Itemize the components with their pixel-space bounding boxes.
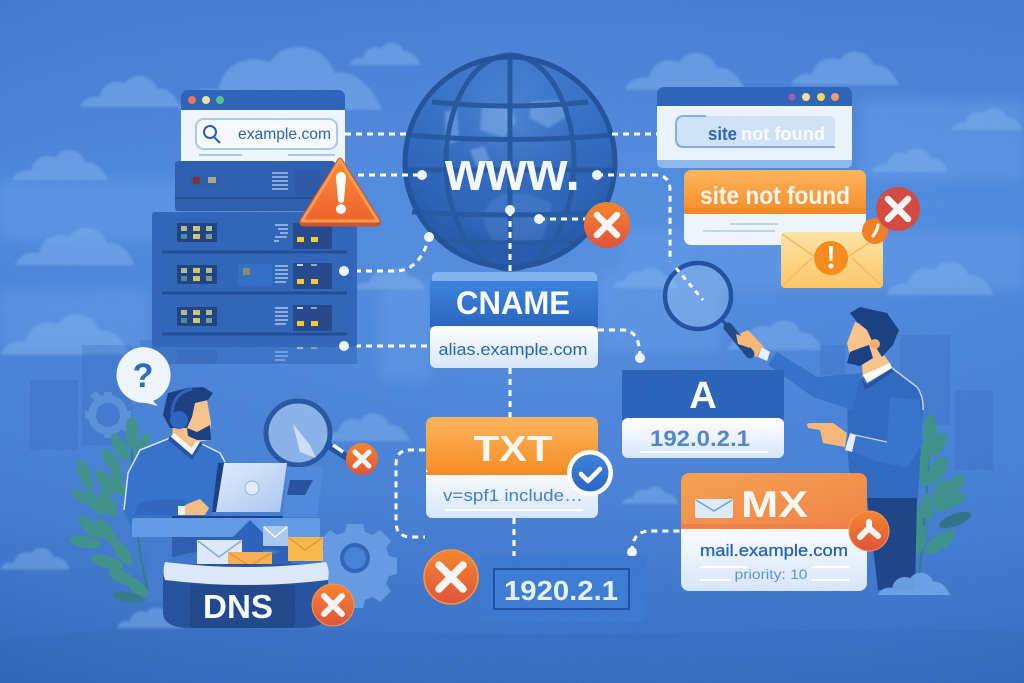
TXT card: TXT (474, 428, 553, 469)
error card: site not found (684, 170, 866, 245)
MX card: priority: 10 (734, 567, 808, 582)
warning triangle (302, 160, 378, 224)
desk (132, 518, 320, 537)
speech bubble: ? (133, 357, 153, 395)
address bar: site (708, 124, 737, 144)
sweater (123, 438, 225, 525)
background gear (85, 391, 132, 438)
person: analyst pointing (733, 307, 923, 590)
error badge: globe (584, 202, 630, 248)
dashed connector lines (344, 134, 681, 556)
rack unit 2 (162, 257, 347, 293)
head (163, 387, 213, 443)
IP error box: 1920.2.1 (504, 575, 618, 606)
top server (175, 161, 335, 211)
globe label www: www. (444, 140, 580, 202)
rack frame (152, 212, 357, 347)
CNAME card: alias.example.com (438, 340, 588, 359)
raised arm (768, 352, 862, 410)
hands (807, 423, 847, 447)
address bar (676, 116, 835, 147)
error badge: MX (849, 511, 889, 551)
head (847, 307, 899, 390)
DNS tub with envelopes: DNS (203, 588, 273, 625)
TXT card (426, 417, 598, 518)
globe landmasses (445, 100, 568, 244)
pointing arm (850, 397, 923, 468)
rack unit 4 faded (152, 338, 357, 364)
error badge: DNS (312, 584, 354, 626)
hand and laptop (185, 499, 209, 515)
CNAME card: CNAME (456, 285, 570, 321)
magnifier: left (266, 401, 348, 465)
search box: example.com (238, 126, 331, 143)
MX card: mail.example.com (700, 541, 848, 560)
error badge: magnifier (346, 443, 378, 475)
connector dots (417, 170, 645, 557)
DNS tub with envelopes (163, 520, 329, 628)
foreground cloud (878, 573, 950, 595)
rack connector dots (339, 266, 349, 351)
plant left (68, 417, 153, 605)
neck (172, 425, 200, 455)
torso (847, 368, 923, 498)
bottom ground band (0, 629, 1024, 683)
rack unit 3 (162, 298, 347, 334)
A record card (622, 370, 784, 458)
A record card: 192.0.2.1 (650, 426, 750, 451)
speech bubble (116, 347, 171, 406)
IP error box (480, 556, 645, 622)
envelope alert (781, 232, 883, 288)
gear: right (313, 524, 397, 608)
globe grid (403, 55, 617, 269)
MX card: MX (741, 484, 808, 525)
A record card: A (689, 375, 717, 417)
shoulder outline (892, 368, 923, 410)
person: support agent at laptop (123, 387, 323, 603)
trousers (867, 498, 917, 590)
TXT card: v=spf1 include… (443, 486, 583, 505)
server rack (152, 161, 357, 364)
magnifier: right (665, 263, 752, 354)
plant right (910, 415, 973, 590)
rack unit 1 (162, 217, 347, 252)
globe (403, 55, 617, 269)
error badge: site card (876, 187, 920, 231)
chair back (283, 467, 323, 517)
mail icon (695, 499, 733, 518)
forearm (135, 499, 185, 515)
address bar: not found (741, 124, 825, 144)
MX card (681, 473, 867, 591)
search box (196, 119, 337, 149)
background buildings left (30, 340, 160, 450)
soft background bands (0, 100, 1024, 380)
background buildings right (820, 335, 993, 470)
error badge: IP (424, 550, 478, 604)
error card: site not found: site not found (700, 182, 850, 210)
check badge (567, 450, 613, 496)
CNAME card (430, 272, 598, 368)
small orange badge (862, 218, 888, 244)
cuffs (845, 433, 856, 452)
browser window: site not found (657, 87, 852, 168)
envelopes (197, 526, 323, 572)
browser window: search (181, 90, 345, 164)
